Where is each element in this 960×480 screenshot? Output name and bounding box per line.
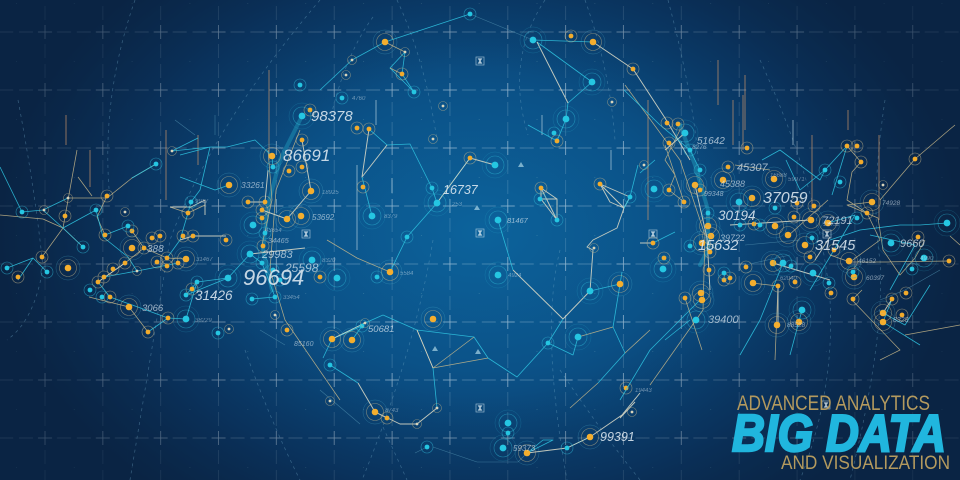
number labels: 19443 xyxy=(635,388,652,394)
small marker icons xyxy=(302,57,831,412)
number labels: 19452 xyxy=(823,222,840,228)
dense cyan band xyxy=(263,120,300,290)
left cluster connections xyxy=(0,115,311,345)
network: centre xyxy=(417,165,650,408)
number labels: 4990 xyxy=(920,256,934,262)
number labels: 9660 xyxy=(900,238,925,250)
number labels: 33454 xyxy=(283,295,300,301)
network: left interior xyxy=(327,102,513,284)
number labels: 388 xyxy=(147,244,164,255)
number labels: 99348 xyxy=(704,191,724,198)
number labels: 59971 xyxy=(788,177,805,183)
number labels: 34465 xyxy=(268,236,290,245)
number labels: 16688 xyxy=(770,173,787,179)
number labels: 3066 xyxy=(142,303,164,314)
dense cyan band xyxy=(680,125,708,265)
network: lower arc xyxy=(314,265,640,465)
globe outline and central network xyxy=(314,8,690,465)
number labels: 81467 xyxy=(507,216,529,225)
number labels: 8379 xyxy=(384,214,398,220)
left cluster cyan nodes xyxy=(1,79,325,339)
number labels: 18925 xyxy=(322,190,339,196)
number labels: 31426 xyxy=(195,288,233,303)
number labels: 74928 xyxy=(882,200,900,207)
left cluster orange nodes xyxy=(12,104,323,338)
number labels: 5584 xyxy=(400,271,414,277)
left data cluster xyxy=(0,79,340,400)
number labels: 30194 xyxy=(718,208,756,223)
number labels: 60397 xyxy=(866,275,884,282)
number labels: 33261 xyxy=(241,180,265,190)
number labels: 85160 xyxy=(294,341,314,348)
right cluster orange nodes xyxy=(640,117,955,337)
number labels: 46152 xyxy=(858,258,876,265)
number labels: 31467 xyxy=(196,257,213,263)
number labels: 15632 xyxy=(698,238,738,254)
vertical data ticks xyxy=(66,60,879,250)
right data cluster xyxy=(620,85,960,400)
number labels: 9917 xyxy=(195,199,209,205)
network: top arc xyxy=(320,8,690,160)
number labels: 16737 xyxy=(443,183,479,197)
right cluster cyan nodes xyxy=(641,120,960,333)
number labels: 4760 xyxy=(352,96,366,102)
number labels: 53692 xyxy=(312,213,335,222)
title block xyxy=(732,392,950,474)
number labels: 62040 xyxy=(780,276,797,282)
number labels: 8743 xyxy=(385,408,399,414)
number labels: 99391 xyxy=(600,430,635,444)
number labels: 96694 xyxy=(243,265,304,290)
number labels: 88528 xyxy=(787,322,805,329)
number labels: 37059 xyxy=(763,190,808,207)
number labels: 253 xyxy=(451,202,463,208)
number labels: 50681 xyxy=(368,324,394,335)
number labels: 29983 xyxy=(261,249,293,261)
number labels: 51642 xyxy=(697,136,725,147)
number labels: 59373 xyxy=(513,444,536,453)
number labels: 38229 xyxy=(195,318,212,324)
number labels: 39400 xyxy=(708,314,739,326)
number labels: 43654 xyxy=(265,228,282,234)
number labels: 4924 xyxy=(508,273,522,279)
number labels: 8328 xyxy=(893,317,909,324)
number labels: 25598 xyxy=(284,261,319,275)
number labels: 45388 xyxy=(720,179,745,189)
number labels: 86691 xyxy=(283,146,330,165)
number labels: 31545 xyxy=(815,238,856,254)
number labels: 98378 xyxy=(311,108,353,125)
right cluster connections xyxy=(620,90,960,400)
number labels: 8276 xyxy=(692,144,707,151)
number labels: 39722 xyxy=(720,233,745,243)
number labels: 45307 xyxy=(737,162,768,174)
number labels: 72191 xyxy=(822,215,853,227)
number labels: 8320 xyxy=(322,258,336,264)
number labels xyxy=(142,96,934,453)
